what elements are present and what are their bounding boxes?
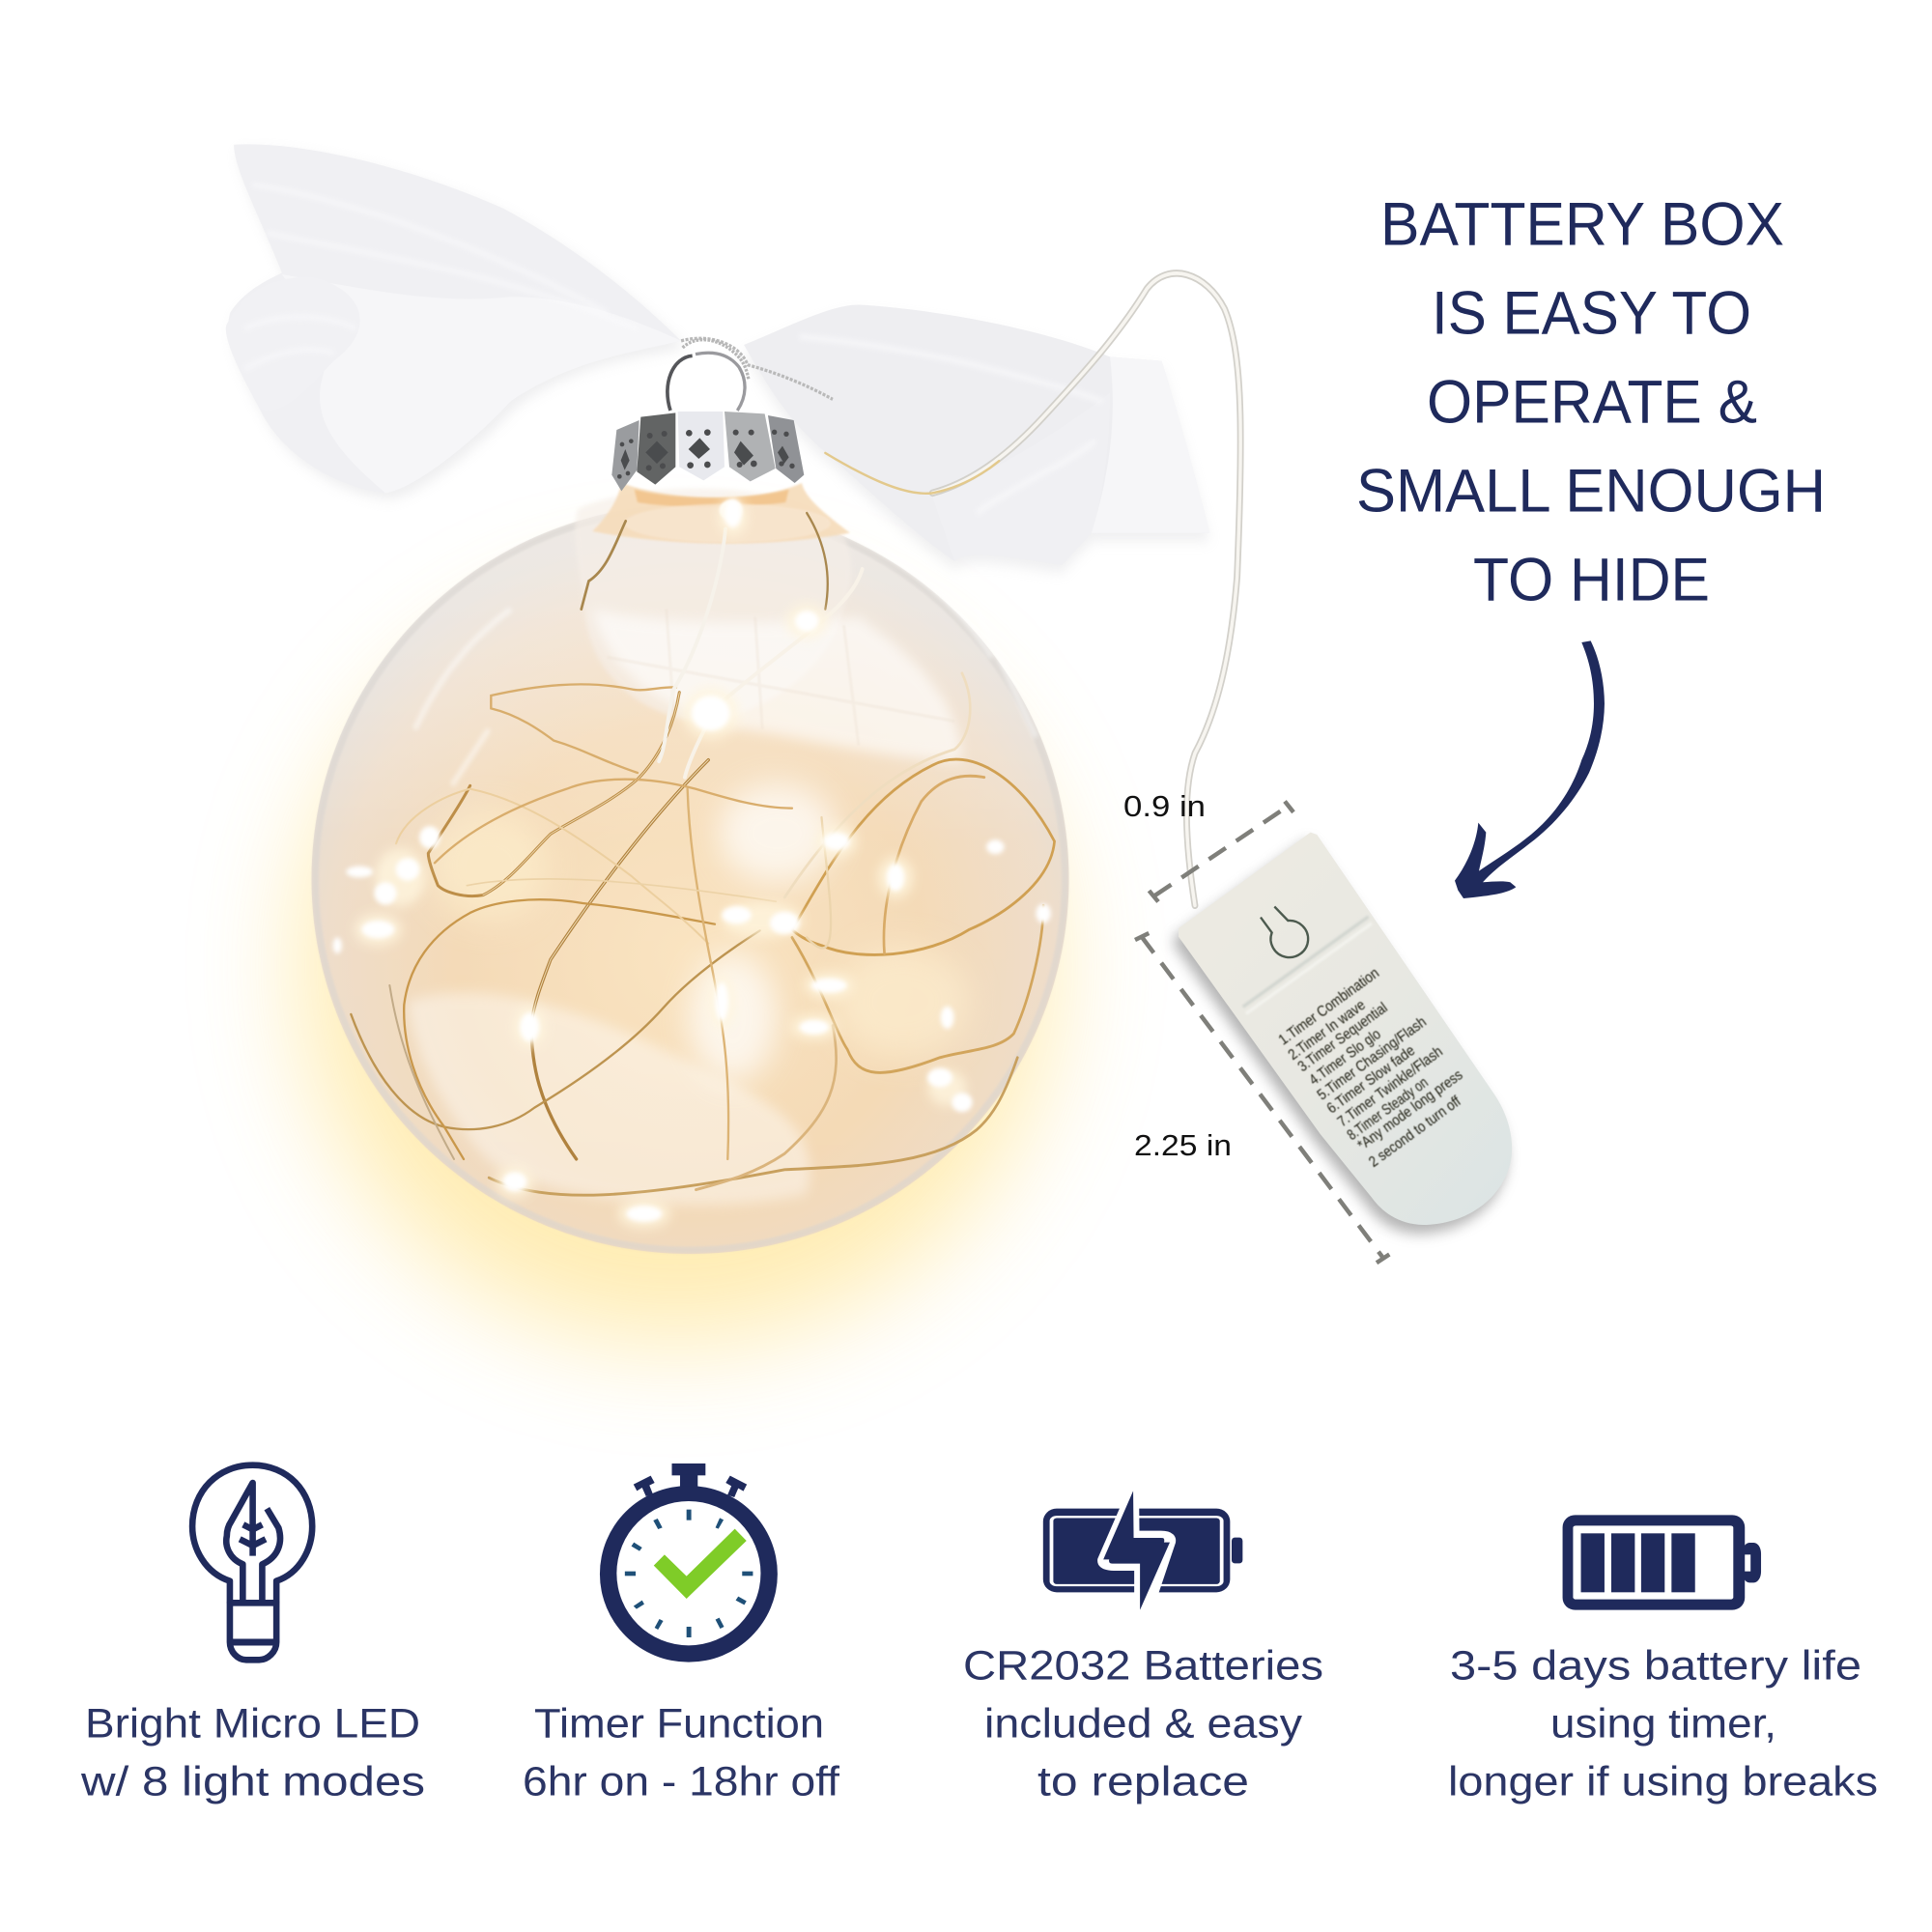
icon: battery level (1563, 1515, 1761, 1610)
caption: battery life: longer if using breaks (1448, 1758, 1878, 1804)
headline: battery box: TO HIDE (1473, 547, 1710, 614)
ball glass (311, 504, 1068, 1254)
icon: charging battery (1043, 1491, 1242, 1610)
length dimension line (1135, 933, 1389, 1263)
battery box mode list: 3.Timer Sequential (1295, 1000, 1391, 1075)
caption: timer function: Timer Function (534, 1700, 824, 1747)
wires left region (351, 684, 792, 1159)
headline: battery box: IS EASY TO (1432, 280, 1751, 348)
box groove (1243, 917, 1369, 1007)
battery box mode list: 6.Timer Slow fade (1324, 1042, 1418, 1117)
neck amber collar (592, 483, 850, 544)
metal cap and ring (611, 340, 804, 491)
battery box mode list (1276, 965, 1466, 1171)
headline: battery box (1356, 191, 1826, 614)
LED light halos (355, 497, 967, 1228)
LED lights (333, 498, 1051, 1222)
headline: battery box: OPERATE & (1427, 369, 1757, 437)
ball rim (315, 508, 1065, 1250)
caption: battery life: using timer, (1550, 1700, 1776, 1747)
battery box mode list: 4.Timer Slo glo (1306, 1026, 1384, 1089)
battery box mode list: *Any mode long press (1354, 1066, 1466, 1153)
caption: CR2032 batteries: to replace (1037, 1758, 1249, 1804)
headline: battery box: SMALL ENOUGH (1356, 458, 1826, 526)
battery box mode list: 1.Timer Combination (1276, 965, 1382, 1048)
arrow pointing to battery box (1455, 640, 1605, 898)
label: 2.25 in: 2.25 in (1134, 1128, 1232, 1162)
caption: battery life (1448, 1642, 1878, 1804)
glass neck and reflections (408, 489, 1036, 1205)
caption: battery life: 3-5 days battery life (1450, 1642, 1861, 1689)
caption: CR2032 batteries: CR2032 Batteries (963, 1642, 1323, 1689)
battery box mode list: 8.Timer Steady on (1345, 1074, 1432, 1144)
caption: timer function: 6hr on - 18hr off (523, 1758, 840, 1804)
ribbon bow (226, 144, 1209, 573)
caption: bright micro LED: Bright Micro LED (85, 1700, 420, 1747)
caption: CR2032 batteries: included & easy (984, 1700, 1303, 1747)
ball top light (311, 504, 1068, 1254)
icon: stopwatch with check (600, 1463, 778, 1662)
LED wire to battery box (825, 273, 1240, 905)
caption: CR2032 batteries (963, 1642, 1323, 1804)
battery box mode list: 2 second to turn off (1366, 1093, 1464, 1171)
label: 0.9 in: 0.9 in (1123, 789, 1206, 823)
caption: timer function (523, 1700, 840, 1804)
caption: bright micro LED (80, 1700, 425, 1804)
caption: bright micro LED: w/ 8 light modes (80, 1758, 425, 1804)
ornament glow halo (299, 589, 1053, 1343)
headline: battery box: BATTERY BOX (1380, 191, 1784, 259)
battery box mode list: 5.Timer Chasing/Flash (1315, 1013, 1430, 1104)
ornament with ribbon and lights (226, 144, 1240, 1254)
battery box mode list: 7.Timer Twinkle/Flash (1335, 1043, 1446, 1130)
icon: LED bulb with leaf (192, 1465, 312, 1660)
power button mark (1261, 906, 1308, 957)
battery box (1174, 833, 1512, 1234)
wires right region (489, 513, 1055, 1195)
width dimension line (1150, 802, 1293, 902)
battery box mode list: 2.Timer In wave (1286, 997, 1369, 1064)
